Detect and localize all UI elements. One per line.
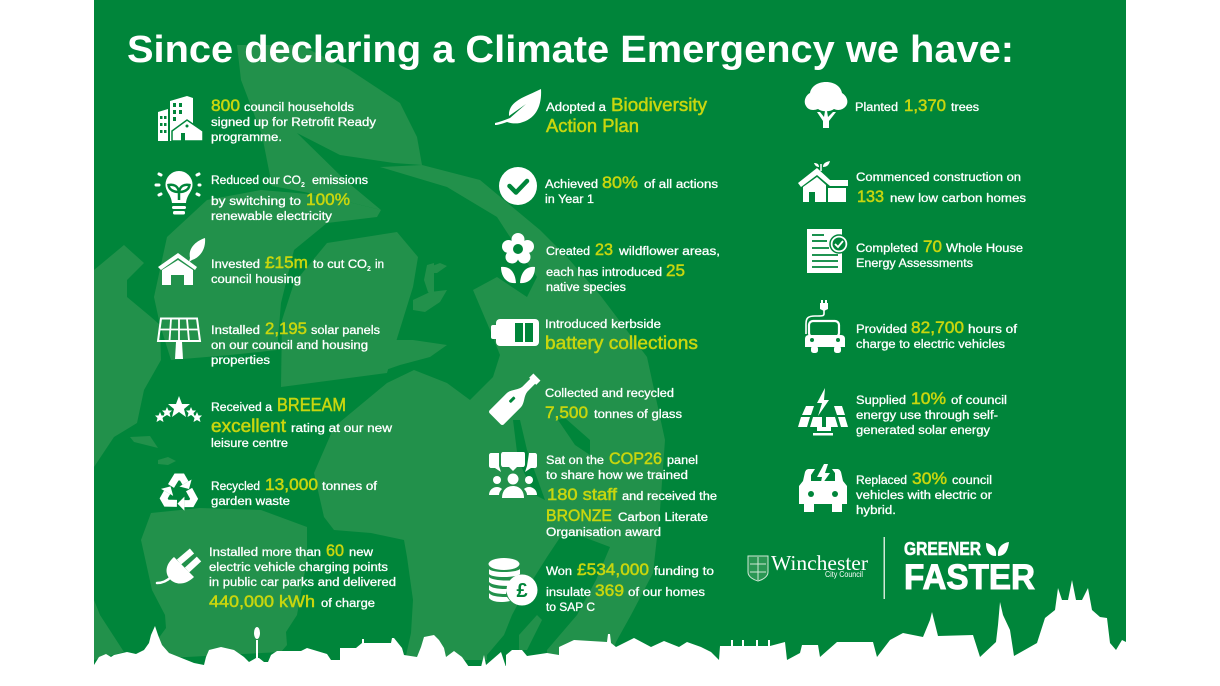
text: Whole House xyxy=(946,241,1023,255)
icon: battery xyxy=(491,319,539,346)
item: replaced vehicles xyxy=(799,464,992,517)
text: council housing xyxy=(211,272,301,286)
text: Action Plan xyxy=(546,116,639,136)
text: council households xyxy=(244,100,354,114)
text: Reduced our CO xyxy=(211,173,301,187)
item: house energy assessments xyxy=(807,229,1023,273)
text: Recycled xyxy=(211,479,260,493)
text: Energy Assessments xyxy=(856,256,973,270)
text xyxy=(545,173,718,206)
text: insulate xyxy=(546,585,591,599)
text: new low carbon homes xyxy=(890,191,1026,205)
divider xyxy=(884,537,885,599)
item: invest 15m xyxy=(158,238,384,286)
text: Installed more than xyxy=(209,545,321,559)
item: EV charging points xyxy=(157,541,396,611)
text: Provided xyxy=(856,322,907,336)
text: renewable electricity xyxy=(211,209,333,223)
logo: Greener Faster: FASTER xyxy=(904,558,1035,597)
text: generated solar energy xyxy=(856,423,991,437)
text: panel xyxy=(667,453,698,467)
icon: buildings xyxy=(158,96,203,141)
icon: five stars xyxy=(155,396,202,422)
text: 440,000 kWh xyxy=(209,592,315,611)
text: rating at our new xyxy=(291,421,392,435)
text xyxy=(211,475,378,508)
item: breeam xyxy=(155,395,392,450)
text: of charge xyxy=(321,596,375,610)
item: recycled garden waste xyxy=(159,475,378,512)
text: hours of xyxy=(968,322,1018,336)
text: to cut CO xyxy=(313,257,367,271)
text: in xyxy=(375,257,384,271)
text: Achieved xyxy=(545,177,598,191)
text: each has introduced xyxy=(546,265,662,279)
text: of all actions xyxy=(644,177,718,191)
icon: bottle xyxy=(488,370,544,426)
text: Won xyxy=(546,564,572,578)
city skyline silhouette xyxy=(94,580,1126,686)
text: 1,370 xyxy=(904,96,946,115)
icon: solar panel with lightning bolt xyxy=(798,388,848,436)
text xyxy=(856,318,1018,351)
text xyxy=(855,96,979,115)
text: Created xyxy=(546,244,590,258)
item: low carbon homes xyxy=(798,161,1026,206)
text: electric vehicle charging points xyxy=(209,560,388,574)
text: 100% xyxy=(306,190,350,209)
item: 80 percent xyxy=(499,167,718,206)
item: solar panels xyxy=(158,318,380,367)
text: Carbon Literate xyxy=(618,510,708,524)
item: battery collections xyxy=(491,317,698,353)
icon: recycle arrows xyxy=(159,477,197,512)
title: Since declaring a Climate Emergency we have: xyxy=(127,29,1014,71)
icon: twin leaves xyxy=(986,542,1009,556)
item: EV charge hours xyxy=(805,300,1018,353)
item: COP26 and bronze award xyxy=(489,449,717,539)
text: Organisation award xyxy=(546,525,661,539)
text: trees xyxy=(951,100,979,114)
text xyxy=(856,170,1026,206)
column 2 xyxy=(488,89,720,614)
item: trees xyxy=(805,82,979,128)
text: by switching to xyxy=(211,194,301,208)
column 3 xyxy=(798,82,1026,517)
text: BRONZE xyxy=(546,506,612,525)
column 1 xyxy=(155,96,396,611)
watermark: ocean channels xyxy=(487,418,610,660)
text: 60 xyxy=(326,541,344,560)
text: energy use through self- xyxy=(856,408,998,422)
text: to share how we trained xyxy=(546,468,688,482)
text xyxy=(209,541,396,611)
text: 70 xyxy=(923,237,942,256)
text: tonnes of glass xyxy=(594,407,682,421)
text: 25 xyxy=(666,261,685,280)
text: 2 xyxy=(301,182,305,189)
text: 180 staff xyxy=(547,485,617,504)
text: charge to electric vehicles xyxy=(856,337,1005,351)
text: and received the xyxy=(622,489,717,503)
icon: checked document xyxy=(807,229,848,273)
text xyxy=(856,389,1007,437)
icon: plug xyxy=(157,551,199,584)
text: in public car parks and delivered xyxy=(209,575,396,589)
text: of our homes xyxy=(628,585,705,599)
text: Invested xyxy=(211,257,260,271)
text: 13,000 xyxy=(265,475,318,494)
text: leisure centre xyxy=(211,436,288,450)
text: BREEAM xyxy=(277,395,346,415)
text: Received a xyxy=(211,400,272,414)
icon: coins with pound xyxy=(488,558,538,606)
text xyxy=(211,319,380,367)
text: funding to xyxy=(654,564,714,578)
text: properties xyxy=(211,353,270,367)
watermark: strip of land xyxy=(519,615,542,650)
text xyxy=(546,95,707,136)
text: 23 xyxy=(595,240,613,259)
icon: tree xyxy=(805,82,847,128)
text xyxy=(211,253,384,286)
text: Biodiversity xyxy=(611,95,707,115)
text: Sat on the xyxy=(546,453,604,467)
text: 10% xyxy=(911,389,946,408)
text: to SAP C xyxy=(546,600,595,614)
text: COP26 xyxy=(609,449,662,468)
text: Commenced construction on xyxy=(856,170,1021,184)
text: signed up for Retrofit Ready xyxy=(211,115,377,129)
icon: crest xyxy=(748,556,768,581)
text xyxy=(211,96,377,144)
icon: house with leaf xyxy=(158,238,205,285)
text: solar panels xyxy=(311,323,380,337)
text: £15m xyxy=(265,253,308,272)
text: 2,195 xyxy=(265,319,307,338)
item: retrofit ready xyxy=(158,96,377,144)
text xyxy=(546,449,717,539)
text xyxy=(856,237,1023,270)
text xyxy=(545,386,682,422)
text: Planted xyxy=(855,100,898,114)
text: Supplied xyxy=(856,393,906,407)
text: garden waste xyxy=(211,494,290,508)
text: council xyxy=(952,473,992,487)
text: Adopted a xyxy=(546,100,606,114)
text: 80% xyxy=(602,173,638,192)
text: Installed xyxy=(211,323,260,337)
icon: people with speech bubbles xyxy=(489,452,537,498)
text: of council xyxy=(951,393,1007,407)
text xyxy=(211,395,392,450)
icon: check circle xyxy=(499,167,537,205)
text: 30% xyxy=(912,469,947,488)
text: new xyxy=(349,545,373,559)
logo: Greener Faster: GREENER xyxy=(904,539,981,559)
text: native species xyxy=(546,280,626,294)
icon: light bulb with sprout xyxy=(156,171,200,214)
text: in Year 1 xyxy=(545,192,594,206)
text xyxy=(211,173,368,223)
item: funding xyxy=(488,558,714,614)
watermark: globe and leaves xyxy=(94,45,665,660)
text: excellent xyxy=(211,416,286,436)
logo: Winchester City Council: Winchester xyxy=(771,551,868,575)
icon: house with sprout xyxy=(798,161,848,202)
text: Collected and recycled xyxy=(545,386,674,400)
item: biodiversity plan xyxy=(495,89,707,136)
text: 369 xyxy=(595,581,624,600)
text: £534,000 xyxy=(577,560,649,579)
icon: leaf xyxy=(495,89,541,125)
text xyxy=(545,317,698,353)
text: wildflower areas, xyxy=(618,244,720,258)
logo: Winchester City Council: City Council xyxy=(825,570,863,579)
text: vehicles with electric or xyxy=(856,488,992,502)
icon: solar panel xyxy=(158,318,200,359)
text: 133 xyxy=(857,187,884,206)
text xyxy=(856,469,992,517)
text: tonnes of xyxy=(322,479,378,493)
text: programme. xyxy=(211,130,282,144)
icon: electric car xyxy=(799,464,847,512)
text xyxy=(546,560,714,614)
icon: coins with pound: £ xyxy=(516,580,528,602)
item: wildflower areas xyxy=(501,233,720,294)
text: emissions xyxy=(312,173,368,187)
item: renewable electricity xyxy=(156,171,368,223)
item: solar energy xyxy=(798,388,1007,437)
text: hybrid. xyxy=(856,503,896,517)
text: battery collections xyxy=(545,333,698,353)
text: on our council and housing xyxy=(211,338,368,352)
icon: electric car with plug xyxy=(805,300,845,353)
text: 800 xyxy=(211,96,240,115)
text: Completed xyxy=(856,241,918,255)
logo: Greener Faster xyxy=(904,539,1035,597)
text: 7,500 xyxy=(545,403,588,422)
text: 82,700 xyxy=(911,318,964,337)
text: Replaced xyxy=(856,473,907,487)
item: glass xyxy=(488,370,682,426)
text: 2 xyxy=(367,266,371,273)
logo: Winchester City Council xyxy=(748,551,868,581)
text xyxy=(546,240,720,294)
icon: flower xyxy=(501,233,535,283)
text: Introduced kerbside xyxy=(545,317,661,331)
